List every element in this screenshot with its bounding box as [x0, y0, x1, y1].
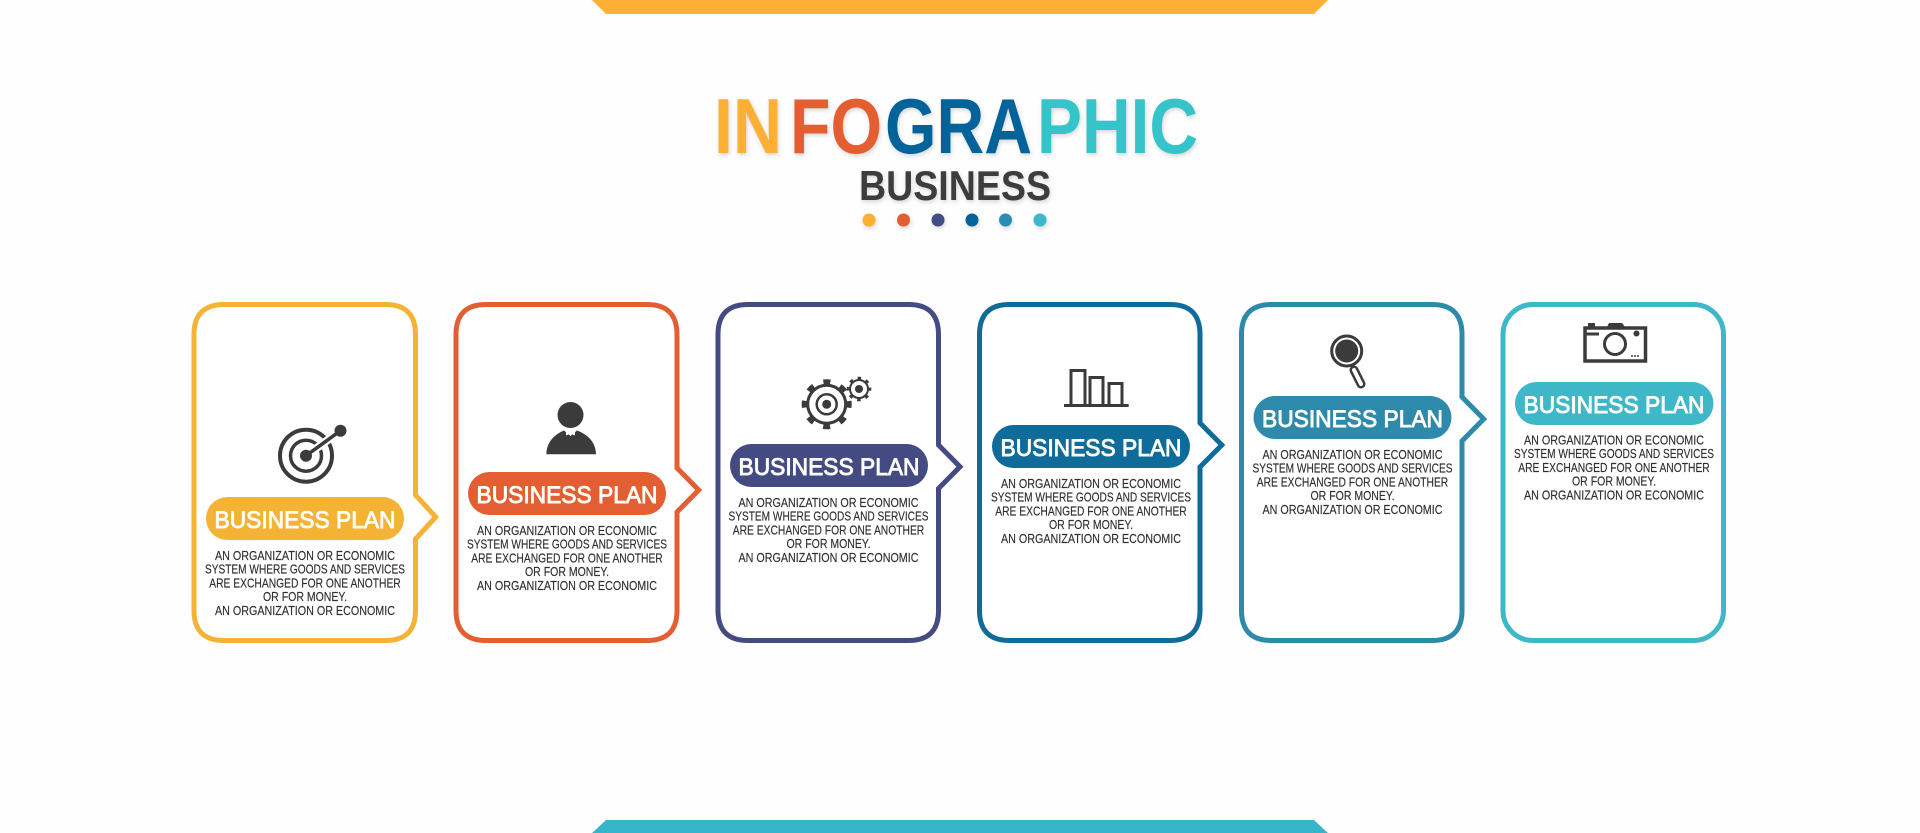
body text 6: SYSTEM WHERE GOODS AND SERVICES: [1514, 447, 1714, 461]
card 2 outline with arrow: [456, 304, 699, 640]
icon: bar chart: [1064, 370, 1129, 406]
card 3 outline with arrow: [718, 304, 960, 640]
heading pill 1: BUSINESS PLAN: [214, 507, 396, 534]
body text 5: AN ORGANIZATION OR ECONOMIC: [1262, 503, 1442, 517]
title: INFOGRAPHIC: FO: [790, 82, 882, 170]
card 1 outline with arrow: [194, 304, 436, 640]
card 5 outline with arrow: [1242, 304, 1484, 640]
heading pill 2: [468, 472, 666, 515]
body text 3: AN ORGANIZATION OR ECONOMIC: [738, 496, 918, 510]
icon: camera: [1585, 323, 1646, 361]
heading pill 1: [206, 497, 404, 540]
body text 5: [1252, 448, 1452, 517]
body text 4: AN ORGANIZATION OR ECONOMIC: [1001, 477, 1181, 491]
body text 5: AN ORGANIZATION OR ECONOMIC: [1262, 448, 1442, 462]
body text 5: ARE EXCHANGED FOR ONE ANOTHER: [1257, 475, 1448, 489]
body text 6: [1514, 434, 1714, 502]
body text 3: [728, 496, 928, 565]
body text 1: AN ORGANIZATION OR ECONOMIC: [215, 604, 395, 618]
body text 1: OR FOR MONEY.: [263, 590, 347, 604]
card 6 outline: [1503, 304, 1724, 640]
body text 4: ARE EXCHANGED FOR ONE ANOTHER: [995, 504, 1187, 518]
body text 3: AN ORGANIZATION OR ECONOMIC: [738, 551, 918, 565]
heading pill 5: [1254, 396, 1452, 439]
panel: card 3: [718, 304, 960, 640]
body text 6: AN ORGANIZATION OR ECONOMIC: [1524, 488, 1704, 502]
panel: card 5: [1242, 304, 1484, 640]
title: INFOGRAPHIC: GRA: [885, 82, 1032, 170]
body text 5: SYSTEM WHERE GOODS AND SERVICES: [1252, 462, 1452, 476]
heading pill 3: BUSINESS PLAN: [738, 454, 920, 481]
heading pill 4: [992, 425, 1190, 468]
body text 2: OR FOR MONEY.: [525, 565, 609, 579]
body text 3: SYSTEM WHERE GOODS AND SERVICES: [728, 510, 928, 524]
heading pill 6: BUSINESS PLAN: [1524, 392, 1704, 419]
heading pill 3: [730, 444, 928, 487]
panel: card 2: [456, 304, 699, 640]
body text 2: SYSTEM WHERE GOODS AND SERVICES: [467, 538, 667, 552]
body text 2: ARE EXCHANGED FOR ONE ANOTHER: [471, 551, 663, 565]
icon: gears: [804, 378, 870, 427]
body text 1: ARE EXCHANGED FOR ONE ANOTHER: [209, 576, 401, 590]
body text 2: AN ORGANIZATION OR ECONOMIC: [477, 524, 657, 538]
body text 1: [205, 549, 405, 618]
body text 2: AN ORGANIZATION OR ECONOMIC: [477, 579, 657, 593]
subtitle: BUSINESS: BUSINESS: [859, 162, 1051, 209]
icon: magnifier: [1332, 336, 1362, 384]
heading pill 4: BUSINESS PLAN: [1000, 435, 1182, 462]
bottom bar: [592, 820, 1328, 833]
card 4 outline with arrow: [980, 304, 1222, 640]
colored dots row: [862, 214, 1046, 226]
body text 4: SYSTEM WHERE GOODS AND SERVICES: [991, 491, 1191, 505]
panel: card 6: [1503, 304, 1724, 640]
title: INFOGRAPHIC: PHIC: [1037, 82, 1198, 170]
icon: person: [546, 402, 596, 454]
title: INFOGRAPHIC: IN: [714, 82, 782, 170]
body text 1: SYSTEM WHERE GOODS AND SERVICES: [205, 563, 405, 577]
body text 3: OR FOR MONEY.: [786, 537, 870, 551]
body text 6: OR FOR MONEY.: [1572, 474, 1656, 488]
body text 6: AN ORGANIZATION OR ECONOMIC: [1524, 434, 1704, 448]
body text 6: ARE EXCHANGED FOR ONE ANOTHER: [1518, 461, 1710, 475]
body text 4: [991, 477, 1191, 546]
body text 4: AN ORGANIZATION OR ECONOMIC: [1001, 532, 1181, 546]
icon: target: [280, 425, 346, 482]
panel: card 4: [980, 304, 1222, 640]
body text 4: OR FOR MONEY.: [1049, 518, 1133, 532]
panel: card 1: [194, 304, 436, 640]
top bar: [592, 0, 1328, 14]
heading pill 6: [1515, 382, 1714, 425]
body text 3: ARE EXCHANGED FOR ONE ANOTHER: [733, 523, 924, 537]
heading pill 5: BUSINESS PLAN: [1262, 406, 1443, 433]
heading pill 2: BUSINESS PLAN: [476, 482, 658, 509]
title: INFOGRAPHIC: [714, 82, 1198, 170]
body text 5: OR FOR MONEY.: [1310, 489, 1394, 503]
body text 2: [467, 524, 667, 593]
body text 1: AN ORGANIZATION OR ECONOMIC: [215, 549, 395, 563]
